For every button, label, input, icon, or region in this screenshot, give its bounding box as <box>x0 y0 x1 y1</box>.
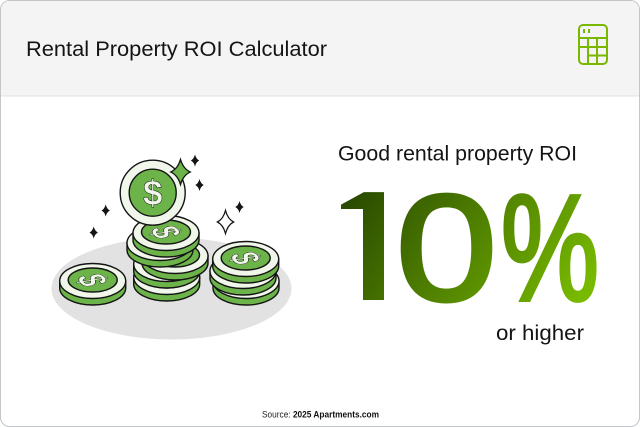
coin stack: centre: $ <box>141 223 191 241</box>
text: good rental property ROI: Good rental property ROI <box>338 142 577 166</box>
coin stack: centre <box>127 216 208 301</box>
ground shadow <box>52 238 292 340</box>
coin stack: right: $ <box>221 249 271 267</box>
coin: left single: $ <box>68 271 118 289</box>
coin: floating dollar coin <box>120 160 185 225</box>
text: or higher: or higher <box>496 321 584 345</box>
big figure: 10%: % <box>501 163 599 332</box>
big figure: 10% <box>341 192 597 304</box>
coin: left single <box>60 264 126 305</box>
big figure: 10%: 0 <box>396 163 497 332</box>
source note: Source: 2025 Apartments.com <box>262 410 379 420</box>
sparkles <box>90 154 244 238</box>
header band <box>1 1 639 96</box>
coin: floating dollar coin: $ <box>143 174 162 213</box>
illustration: coin stacks <box>52 154 292 340</box>
big figure: 10%: 1 <box>322 163 422 332</box>
title: Rental Property ROI Calculator <box>26 38 327 61</box>
icon: calculator <box>579 25 607 64</box>
coin stack: right <box>210 242 279 305</box>
